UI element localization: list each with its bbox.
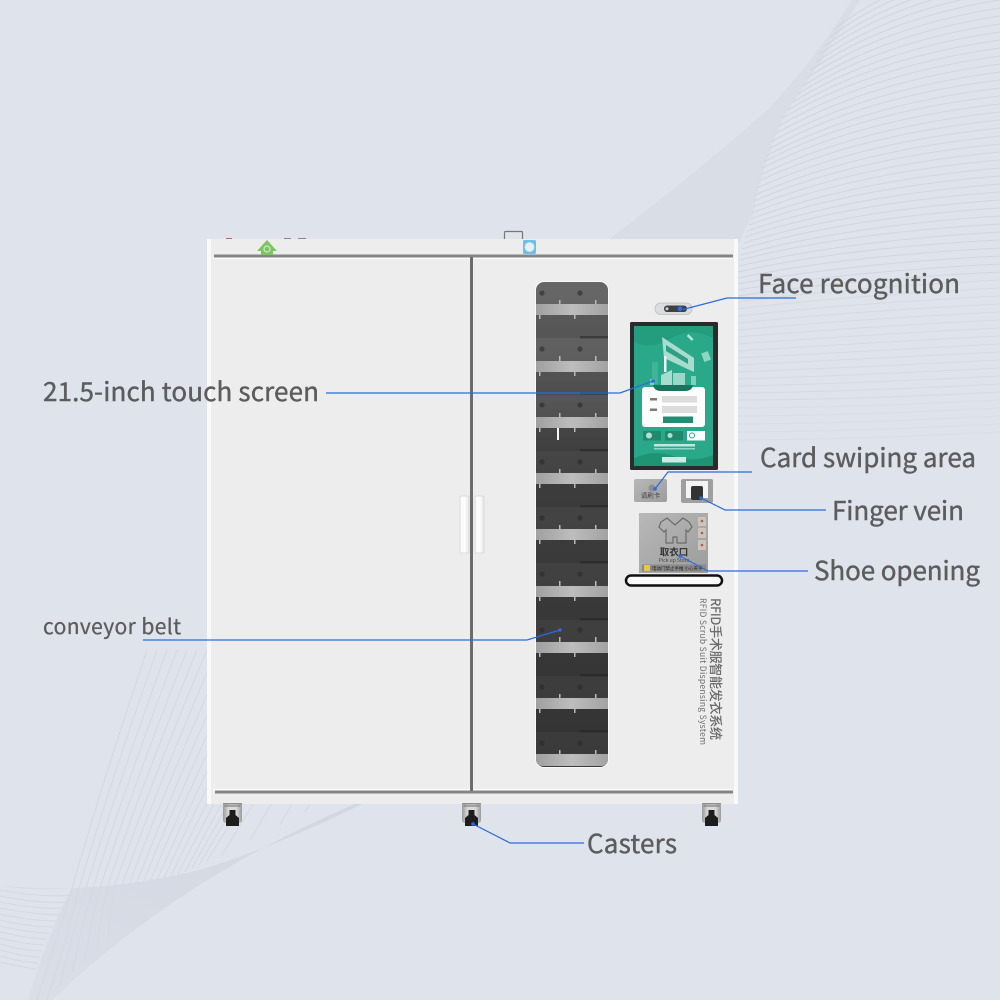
bottom rail [215,790,733,794]
casters [223,803,721,826]
card swiping area [634,479,667,502]
shoe opening panel [639,513,708,573]
login form fields [650,396,697,423]
screen illustration [650,334,711,387]
callout: conveyor belt [43,611,562,641]
shoe opening handle [626,576,722,586]
conveyor dots [539,290,583,746]
warning icons [698,517,706,550]
vertical product name: RFID手术服智能发衣系统 [707,598,726,740]
screen caption [654,444,695,462]
login form header [653,385,693,391]
background wave: bottom left [0,650,390,1000]
card swiping area: 请刷卡 [641,490,661,500]
window shelf shadows [580,336,608,732]
caster centre [462,803,481,826]
callout: card swiping area [653,438,976,491]
warning strip: 电动门禁止手推 小心夹手 [652,565,703,572]
window lower-module shading [536,315,608,732]
callout: casters: Casters [587,824,677,861]
callout: shoe opening [678,551,980,588]
callout: conveyor belt: conveyor belt [43,611,181,641]
touch screen [630,322,718,470]
caster right [702,803,721,826]
finger vein reader [681,479,713,503]
panel sublabel: Pick up Store [659,557,690,564]
slat clips [539,300,596,754]
door seam [470,257,473,791]
panel heading: 取衣口 [660,544,688,558]
callout: casters [471,822,677,861]
callout: shoe opening: Shoe opening [814,551,980,588]
glass window with conveyor belt [535,281,609,768]
vertical product name [697,598,726,745]
callout: finger vein: Finger vein [832,491,964,528]
icon: blue round sticker [523,240,536,254]
conveyor slats [536,304,608,766]
cabinet top fittings [226,232,522,240]
caster left [223,803,242,826]
icon: green arrow sticker [257,240,277,255]
top rail [214,254,733,258]
callout: face recognition [683,264,960,310]
callout: card swiping area: Card swiping area [760,438,976,475]
cabinet body [207,239,738,804]
icon: scrub suit [659,518,692,543]
door handles [460,496,484,553]
face recognition camera [655,303,692,314]
machine cabinet [207,232,738,804]
login form [642,387,705,427]
login method buttons [643,431,705,440]
screen background [634,326,713,466]
callout: face recognition: Face recognition [758,264,960,301]
background wave: top right [608,0,1000,440]
callout: touch screen [43,372,655,409]
callout: touch screen: 21.5-inch touch screen [43,372,319,409]
callout: finger vein [699,491,964,528]
vertical product name: RFID Scrub Suit Dispensing System [697,598,709,745]
